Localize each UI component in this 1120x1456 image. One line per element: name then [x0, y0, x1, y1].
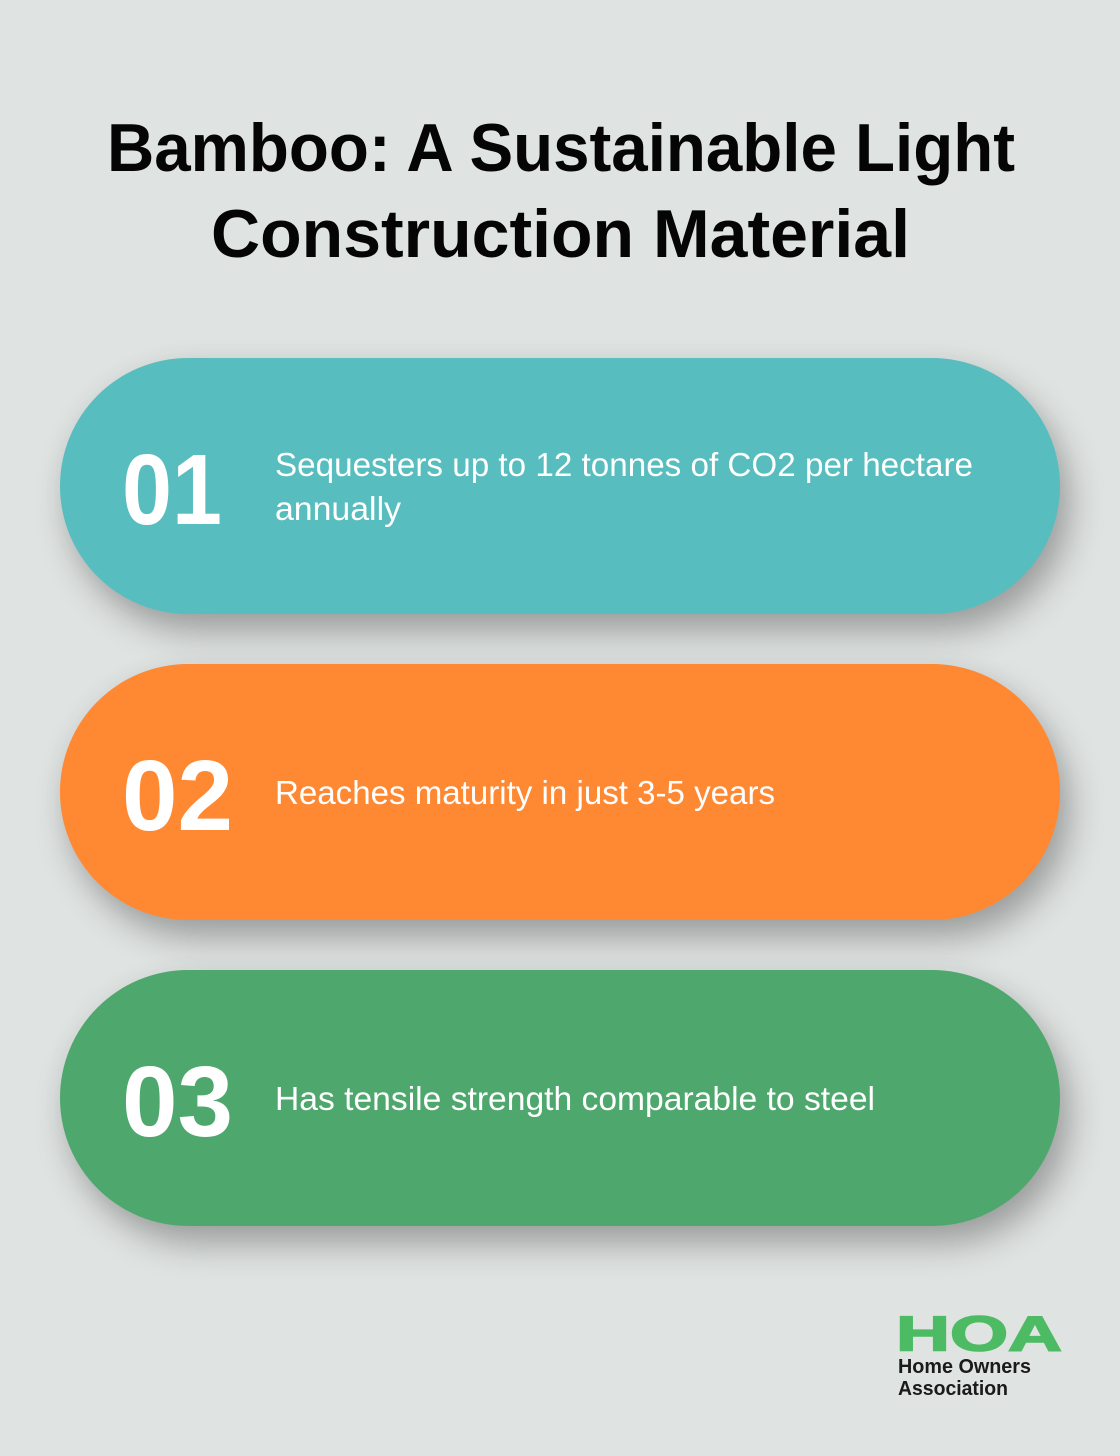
text: step 03: Has tensile strength comparable to steel	[275, 1080, 875, 1117]
text: step 01: annually	[275, 490, 402, 527]
number 01: 01	[122, 434, 222, 546]
number 02: 02	[122, 740, 233, 852]
logo: HOA Home Owners Association: Association	[898, 1378, 1008, 1400]
text: step 02: Reaches maturity in just 3-5 years	[275, 774, 775, 811]
panel: step 01	[60, 358, 1060, 614]
title: Construction Material	[211, 196, 910, 272]
title	[107, 110, 1015, 272]
number 03: 03	[122, 1046, 233, 1158]
logo: HOA Home Owners Association: Home Owners	[898, 1356, 1031, 1378]
text: step 01: Sequesters up to 12 tonnes of CO2 per hectare	[275, 446, 973, 483]
logo: HOA Home Owners Association	[896, 1308, 1062, 1400]
text: step 01	[275, 446, 973, 527]
title: Bamboo: A Sustainable Light	[107, 110, 1015, 186]
panel: step 02	[60, 664, 1060, 920]
logo: HOA Home Owners Association: HOA	[896, 1308, 1062, 1362]
panel: step 03	[60, 970, 1060, 1226]
